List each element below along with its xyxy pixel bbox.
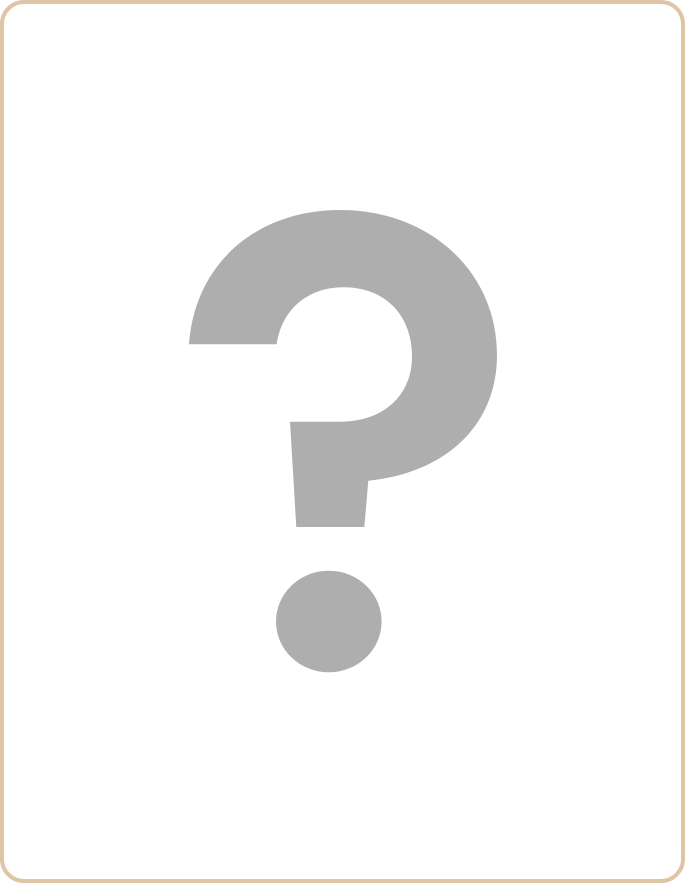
icon: large grey question mark pictogram <box>189 210 497 672</box>
